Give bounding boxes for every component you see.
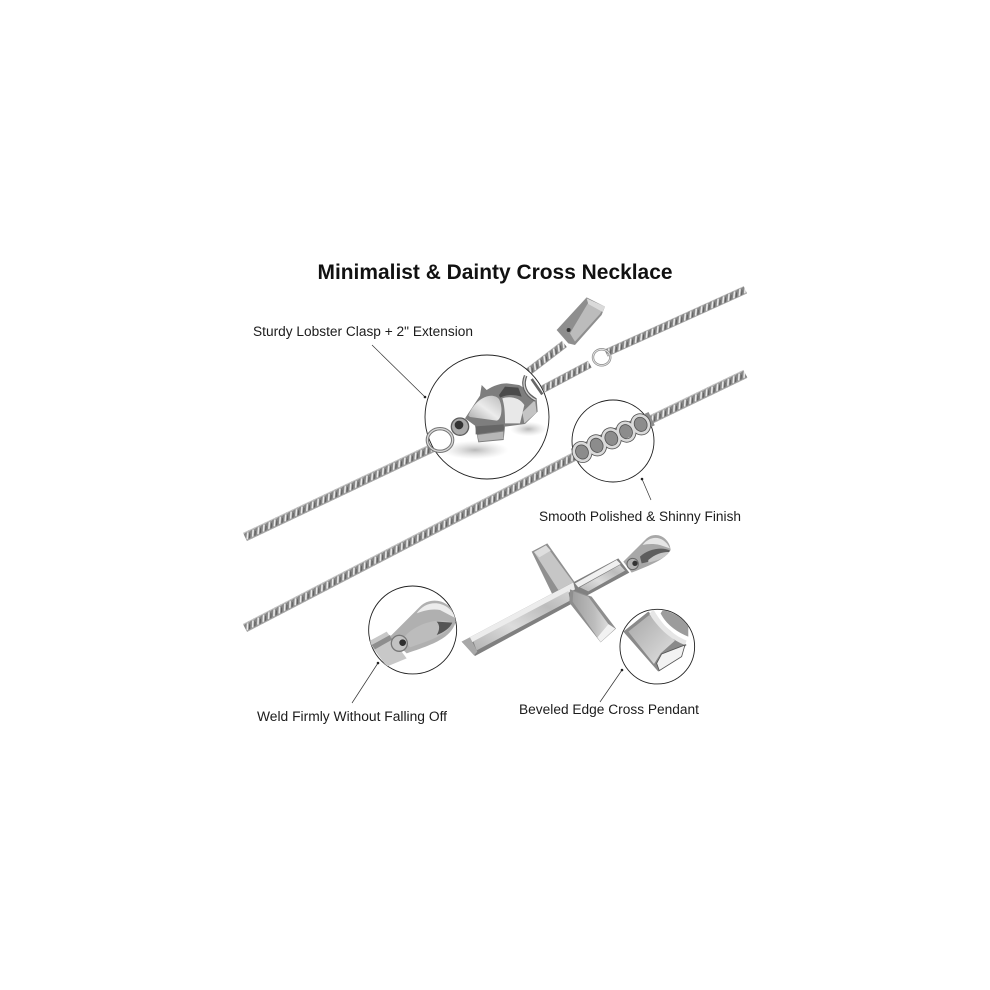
upper chain — [243, 286, 747, 541]
bail — [623, 535, 671, 573]
magnifier: polished chain links — [571, 400, 654, 482]
magnifier: welded bail — [368, 586, 457, 674]
lower chain — [243, 370, 747, 632]
leader: beveled edge — [600, 669, 623, 702]
leader: lobster clasp — [372, 345, 426, 398]
leader: weld — [352, 662, 379, 703]
label: weld: Weld Firmly Without Falling Off — [257, 709, 447, 724]
clasp shadow — [442, 441, 508, 459]
long arm — [462, 558, 629, 656]
cross pendant — [462, 535, 671, 656]
title: Minimalist & Dainty Cross Necklace — [318, 261, 672, 284]
magnifier: beveled edge — [620, 609, 695, 684]
clasp ring — [524, 376, 542, 400]
leader: polished finish — [641, 478, 651, 500]
crossbar upper — [532, 543, 577, 595]
magnifier: lobster clasp — [425, 355, 549, 479]
label: lobster clasp: Sturdy Lobster Clasp + 2" Extension — [253, 324, 473, 339]
jump ring — [427, 429, 453, 451]
lobster clasp body — [451, 383, 538, 442]
crossbar lower — [569, 589, 616, 642]
right shadow — [510, 422, 547, 436]
label: polished finish: Smooth Polished & Shinny Finish — [539, 509, 741, 524]
infographic canvas — [243, 264, 748, 724]
label: beveled edge: Beveled Edge Cross Pendant — [519, 702, 699, 717]
extension chain — [526, 341, 567, 375]
extension tag and ring — [557, 297, 610, 365]
